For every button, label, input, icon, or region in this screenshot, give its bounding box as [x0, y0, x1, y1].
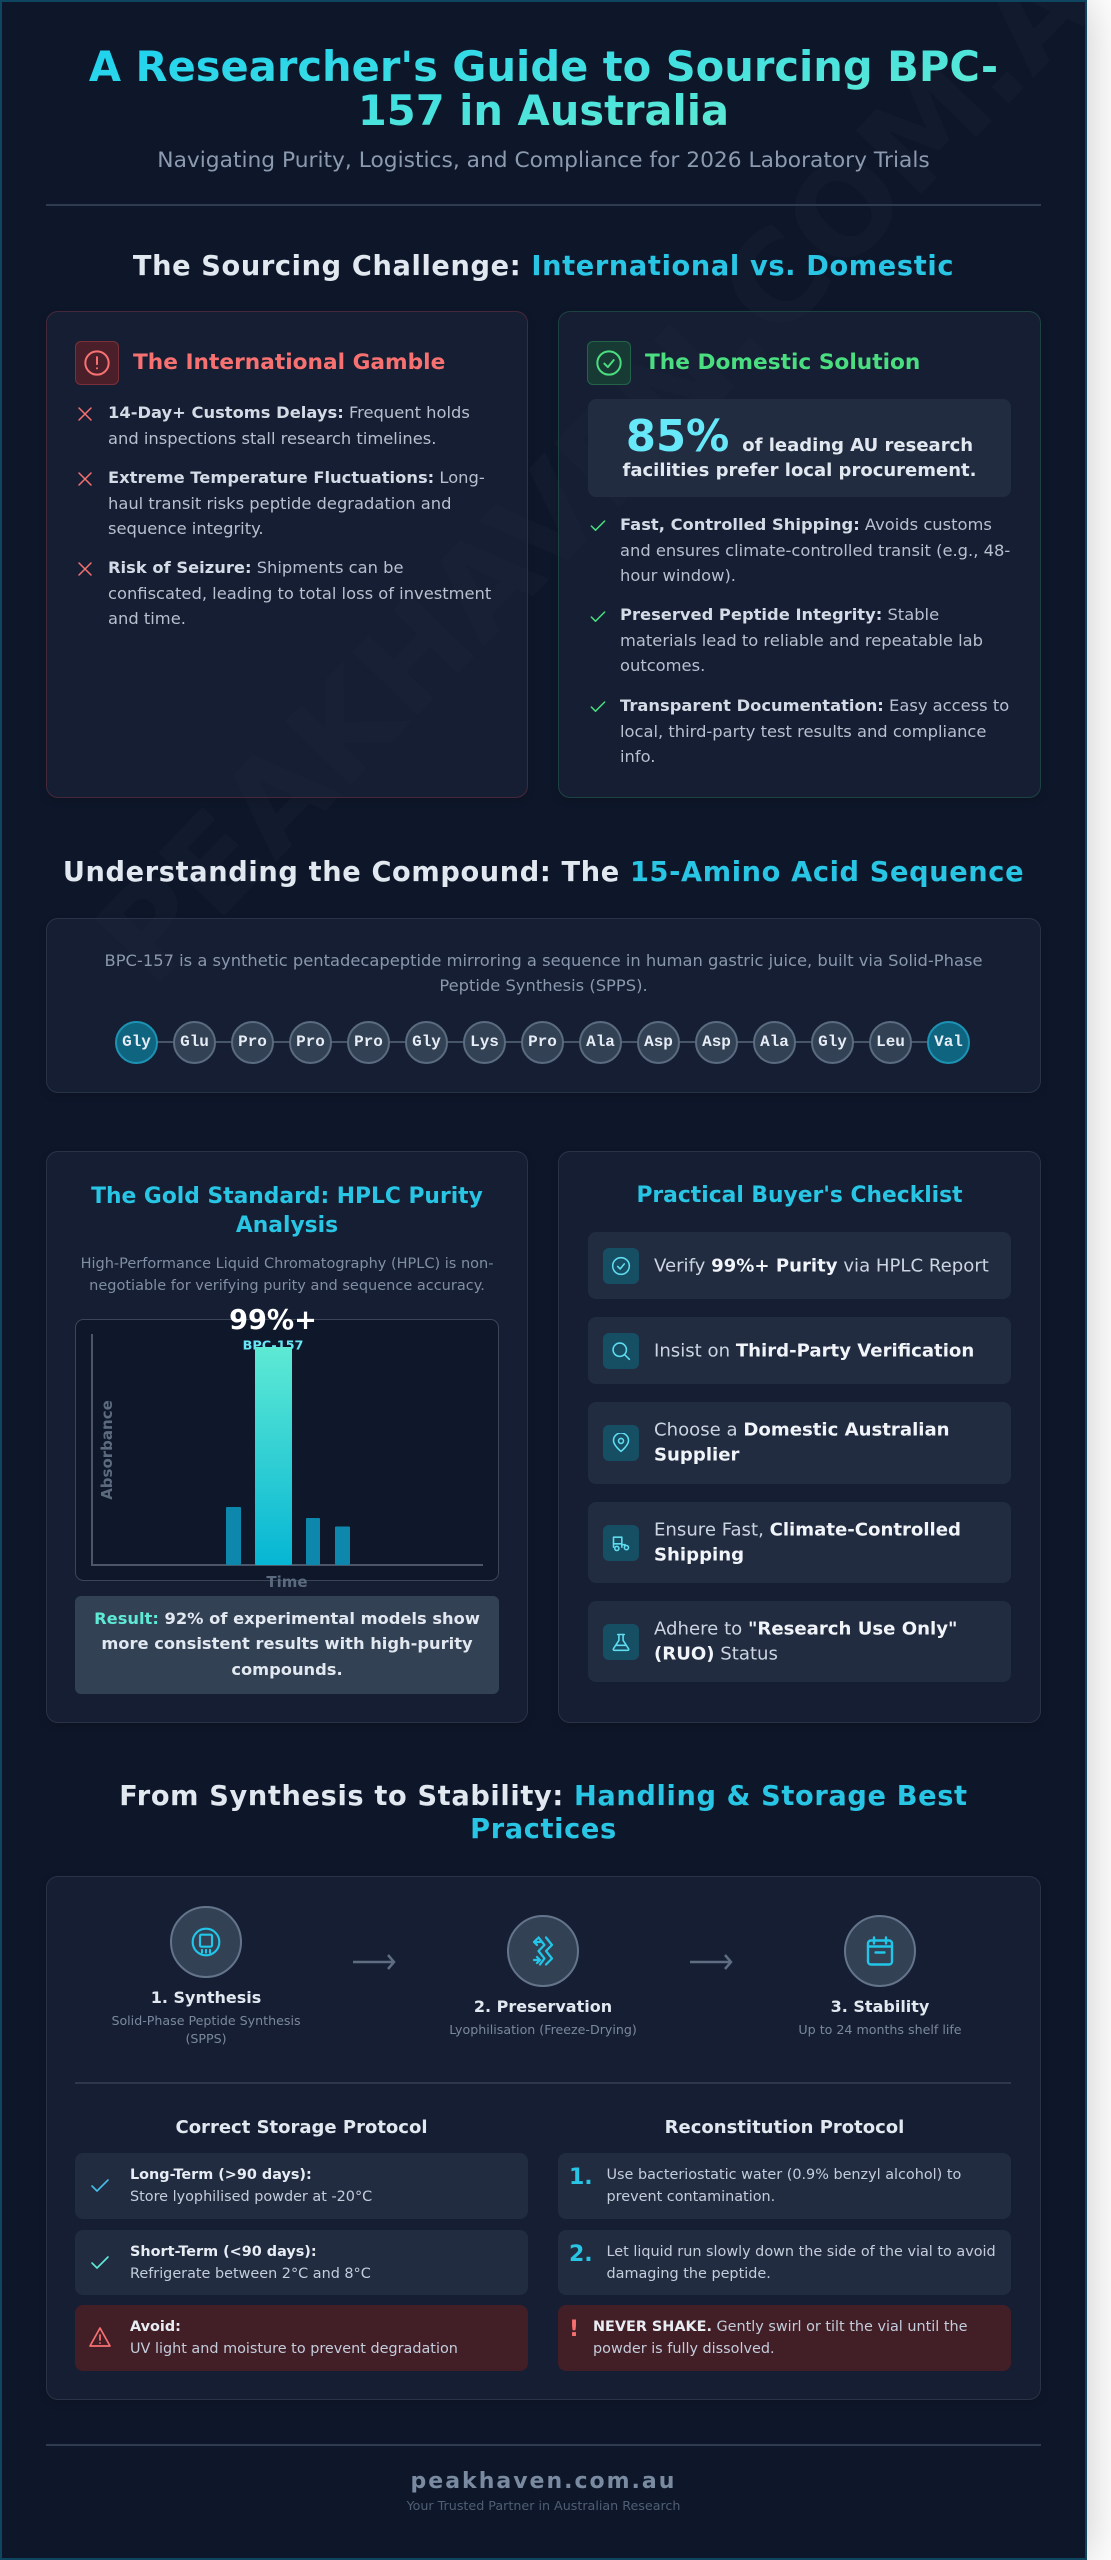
text: integrity: Preserved Peptide Integrity: Stable	[620, 605, 939, 624]
sequence chain: Leu	[876, 1033, 905, 1051]
process step 3	[798, 1915, 962, 2036]
icon: badge check	[603, 1248, 639, 1284]
description	[105, 951, 982, 995]
icon: flask	[603, 1624, 639, 1660]
icon: check	[91, 2179, 109, 2192]
stat text: facilities prefer local procurement.	[622, 460, 976, 481]
item text: Adhere to "Research Use Only"	[654, 1618, 957, 1639]
text: integrity: outcomes.	[620, 656, 705, 675]
item text: Verify 99%+ Purity via HPLC Report	[654, 1255, 989, 1276]
sequence chain: Gly	[818, 1033, 847, 1051]
sequence chain: Ala	[760, 1033, 789, 1051]
text: shipping: hour window).	[620, 566, 736, 585]
text: temperature	[108, 468, 485, 538]
item text	[654, 1420, 950, 1466]
item text: (RUO) Status	[654, 1644, 778, 1664]
text: powder is fully dissolved.	[593, 2341, 775, 2357]
sequence chain: Pro	[296, 1033, 325, 1051]
description: High-Performance Liquid Chromatography (HPLC) is non-	[81, 1256, 493, 1272]
step title: 1. Synthesis	[151, 1988, 261, 2007]
icon: check	[91, 2256, 109, 2269]
icon: truck	[603, 1524, 639, 1560]
description	[81, 1256, 493, 1294]
text	[606, 2244, 996, 2282]
title	[46, 45, 1041, 132]
sequence chain: Lys	[470, 1033, 499, 1051]
sequence chain: Gly	[412, 1033, 441, 1051]
panel: amino acid sequence	[46, 918, 1041, 1093]
subtitle: Navigating Purity, Logistics, and Compliance for 2026 Laboratory Trials	[157, 148, 930, 173]
result callout: compounds.	[231, 1660, 343, 1679]
heading: handling and storage: From Synthesis to Stability: Handling & Storage Best	[119, 1781, 968, 1812]
icon: freeze dry	[507, 1915, 579, 1987]
heading: storage protocol: Correct Storage Protocol	[175, 2117, 428, 2138]
bar chart: Absorbance	[98, 1400, 116, 1500]
text: Store lyophilised powder at -20°C	[130, 2189, 372, 2205]
callout: 85 percent	[588, 399, 1011, 497]
sequence chain: Pro	[238, 1033, 267, 1051]
text: seizure: confiscated, leading to total loss of investment	[108, 584, 491, 602]
title: A Researcher's Guide to Sourcing BPC-	[89, 42, 998, 91]
text: shipping: and ensures climate-controlled transit (e.g., 48-	[620, 540, 1010, 560]
heading: HPLC: Analysis	[236, 1213, 338, 1238]
heading: sourcing challenge: The Sourcing Challenge: International vs. Domestic	[133, 251, 954, 282]
process step 2	[449, 1915, 637, 2036]
item text: Choose a Domestic Australian	[654, 1420, 950, 1441]
bar chart: 99%+	[229, 1305, 317, 1336]
text: temperature: sequence integrity.	[108, 519, 264, 538]
sequence chain: Glu	[180, 1033, 209, 1051]
number: 2.	[569, 2242, 593, 2267]
item text: Insist on Third-Party Verification	[654, 1340, 974, 1361]
text: customs delays	[108, 403, 470, 448]
result callout: more consistent results with high-purity	[101, 1634, 473, 1653]
checklist item: supplier	[588, 1402, 1011, 1484]
item text	[654, 1618, 957, 1664]
checklist item: verification	[588, 1317, 1011, 1384]
heading: handling and storage	[119, 1781, 968, 1845]
sequence chain: Pro	[528, 1033, 557, 1051]
heading: compound: Understanding the Compound: The 15-Amino Acid Sequence	[63, 857, 1024, 888]
heading: handling and storage: Practices	[470, 1814, 617, 1845]
icon: check 1	[590, 520, 606, 531]
sequence chain: Gly	[122, 1033, 151, 1051]
panel: domestic solution	[558, 311, 1041, 798]
stat value: 85% of leading AU research	[626, 412, 973, 462]
text: prevent contamination.	[606, 2189, 775, 2205]
text: integrity	[620, 605, 983, 675]
title: 157 in Australia	[358, 86, 729, 134]
panel: international gamble	[46, 311, 528, 798]
result callout	[75, 1596, 499, 1694]
reconstitution step 2	[558, 2230, 1011, 2295]
text	[130, 2319, 458, 2357]
checklist item: RUO	[588, 1601, 1011, 1682]
process step 1	[111, 1906, 301, 2046]
text: shipping	[620, 515, 1010, 585]
footer tagline: Your Trusted Partner in Australian Research	[407, 2498, 680, 2513]
icon: check circle	[587, 341, 631, 385]
heading: reconstitution protocol: Reconstitution Protocol	[665, 2117, 904, 2138]
text: damaging the peptide.	[606, 2266, 771, 2282]
icon: search	[603, 1332, 639, 1368]
step title: 3. Stability	[831, 1997, 929, 2016]
text: shipping: Fast, Controlled Shipping: Avoids customs	[620, 515, 992, 534]
panel: buyer's checklist	[558, 1151, 1041, 1723]
item text: Supplier	[654, 1445, 739, 1466]
text: integrity: materials lead to reliable and repeatable lab	[620, 630, 983, 650]
heading: HPLC	[91, 1184, 483, 1238]
step description: Lyophilisation (Freeze-Drying)	[449, 2022, 637, 2036]
text: Avoid:	[130, 2319, 181, 2335]
icon: synthesis chip	[170, 1906, 242, 1978]
icon: warning triangle	[89, 2327, 111, 2347]
bar chart: BPC-157	[243, 1338, 303, 1354]
icon: check 3	[590, 701, 606, 712]
text: seizure	[108, 558, 491, 628]
text: UV light and moisture to prevent degradation	[130, 2341, 458, 2357]
item text	[654, 1519, 961, 1566]
warning: never shake	[558, 2305, 1011, 2371]
result callout: Result: 92% of experimental models show	[94, 1609, 480, 1628]
sequence chain: Asp	[644, 1033, 673, 1051]
arrow 1	[353, 1954, 396, 1970]
storage: long term	[75, 2153, 528, 2219]
icon: cross 1	[78, 407, 92, 421]
description: BPC-157 is a synthetic pentadecapeptide mirroring a sequence in human gastric juice, built via Solid-Phase	[105, 951, 982, 970]
text: temperature: Extreme Temperature Fluctuations: Long-	[108, 468, 485, 487]
icon: calendar	[844, 1915, 916, 1987]
icon: alert circle	[75, 341, 119, 385]
icon: cross 3	[78, 562, 92, 576]
text: seizure: Risk of Seizure: Shipments can be	[108, 558, 404, 577]
text: seizure: and time.	[108, 609, 186, 628]
step description: (SPPS)	[185, 2030, 227, 2046]
arrow 2	[690, 1954, 732, 1970]
exclamation mark: !	[569, 2317, 579, 2342]
text: Use bacteriostatic water (0.9% benzyl alcohol) to	[606, 2167, 961, 2183]
sequence chain: Asp	[702, 1033, 731, 1051]
number: 1.	[569, 2165, 593, 2190]
step description: Up to 24 months shelf life	[798, 2022, 962, 2036]
checklist item: shipping	[588, 1502, 1011, 1583]
checklist item: purity	[588, 1232, 1011, 1299]
item text: Shipping	[654, 1544, 744, 1566]
text: documentation	[620, 696, 1009, 766]
storage: short term	[75, 2230, 528, 2295]
storage: avoid	[75, 2305, 528, 2371]
text	[130, 2167, 372, 2205]
text	[593, 2316, 967, 2360]
sequence chain: Ala	[586, 1033, 615, 1051]
heading: domestic solution: The Domestic Solution	[645, 350, 920, 375]
sequence chain: Pro	[354, 1033, 383, 1051]
sequence chain	[115, 1021, 970, 1064]
description: Peptide Synthesis (SPPS).	[439, 976, 648, 995]
text: documentation: Transparent Documentation: Easy access to	[620, 696, 1009, 715]
text: NEVER SHAKE. Gently swirl or tilt the vial until the	[593, 2319, 967, 2335]
text: Short-Term (<90 days):	[130, 2244, 317, 2260]
text: Let liquid run slowly down the side of the vial to avoid	[606, 2244, 996, 2260]
bar chart	[75, 1305, 499, 1591]
icon: location pin	[603, 1425, 639, 1461]
icon: check 2	[590, 611, 606, 622]
step description	[111, 2012, 301, 2046]
panel: handling and storage	[46, 1876, 1041, 2400]
text	[130, 2244, 371, 2282]
description: negotiable for verifying purity and sequence accuracy.	[89, 1278, 485, 1294]
heading: international gamble: The International Gamble	[133, 350, 445, 375]
panel: HPLC purity	[46, 1151, 528, 1723]
sequence chain: Val	[934, 1033, 963, 1051]
text: temperature: haul transit risks peptide degradation and	[108, 494, 451, 512]
icon: cross 2	[78, 472, 92, 486]
text: documentation: local, third-party test results and compliance	[620, 722, 986, 740]
text: customs delays: 14-Day+ Customs Delays: Frequent holds	[108, 403, 470, 422]
panel: HPLC purity: Time	[266, 1573, 308, 1591]
text: documentation: info.	[620, 747, 656, 766]
text: Long-Term (>90 days):	[130, 2167, 312, 2183]
text: Refrigerate between 2°C and 8°C	[130, 2266, 371, 2282]
step description: Solid-Phase Peptide Synthesis	[111, 2012, 301, 2028]
step title: 2. Preservation	[474, 1997, 612, 2016]
heading: checklist: Practical Buyer's Checklist	[636, 1183, 963, 1208]
reconstitution step 1	[558, 2153, 1011, 2219]
heading: HPLC: The Gold Standard: HPLC Purity	[91, 1184, 483, 1209]
item text: Ensure Fast, Climate-Controlled	[654, 1519, 961, 1540]
text: customs delays: and inspections stall research timelines.	[108, 428, 436, 448]
text	[606, 2167, 961, 2205]
footer brand: peakhaven.com.au	[411, 2469, 676, 2494]
